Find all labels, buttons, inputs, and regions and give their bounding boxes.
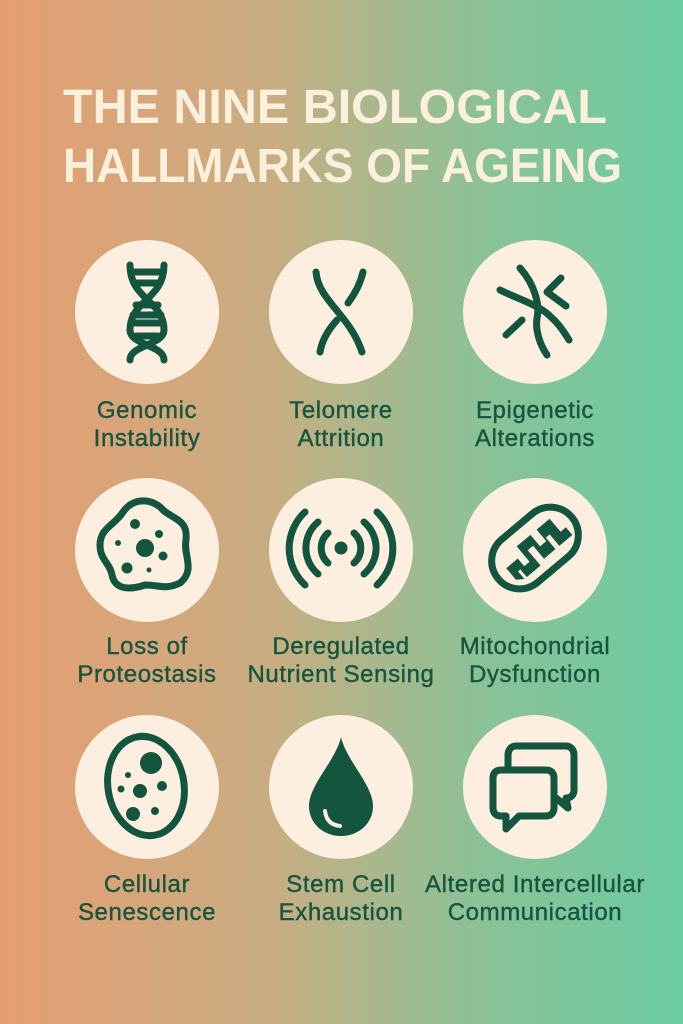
item: telomere attrition — [269, 240, 413, 452]
item: telomere attrition: Attrition — [298, 425, 384, 452]
item: mitochondrial dysfunction: Mitochondrial — [460, 633, 610, 660]
item: epigenetic alterations: Alterations — [475, 425, 595, 452]
item: epigenetic alterations: Epigenetic — [476, 397, 594, 424]
icon: drop — [309, 737, 373, 836]
item: loss of proteostasis — [75, 478, 219, 688]
item: loss of proteostasis: Proteostasis — [77, 661, 217, 688]
item: altered intercellular communication: Communication — [448, 899, 622, 926]
item: epigenetic alterations — [463, 240, 607, 452]
title: HALLMARKS OF AGEING — [63, 140, 622, 193]
item: altered intercellular communication: Altered Intercellular — [425, 871, 645, 898]
item: stem cell exhaustion: Stem Cell — [286, 871, 396, 898]
item: genomic instability: Genomic — [97, 397, 197, 424]
icon: amoeba cell — [100, 501, 188, 588]
item: stem cell exhaustion: Exhaustion — [279, 899, 403, 926]
item: stem cell exhaustion — [269, 715, 413, 926]
item: mitochondrial dysfunction — [460, 478, 610, 688]
icon: broken strands — [500, 268, 569, 355]
item: genomic instability — [75, 240, 219, 452]
icon: speech bubbles — [493, 746, 574, 829]
item: deregulated nutrient sensing: Nutrient Sensing — [247, 661, 435, 688]
icon: signal waves — [289, 512, 393, 585]
icon: chromosome — [316, 272, 363, 352]
item: mitochondrial dysfunction: Dysfunction — [469, 661, 601, 688]
item: deregulated nutrient sensing: Deregulated — [272, 633, 410, 660]
item: cellular senescence: Cellular — [104, 871, 190, 898]
item: telomere attrition: Telomere — [289, 397, 393, 424]
item: altered intercellular communication — [425, 715, 645, 926]
item: cellular senescence — [75, 715, 219, 926]
item: genomic instability: Instability — [94, 425, 200, 452]
title — [63, 81, 622, 193]
icon: mitochondrion — [480, 496, 590, 600]
item: cellular senescence: Senescence — [78, 899, 216, 926]
item: loss of proteostasis: Loss of — [106, 633, 188, 660]
icon: oval cell — [100, 730, 192, 842]
item: deregulated nutrient sensing — [247, 478, 435, 688]
title: THE NINE BIOLOGICAL — [63, 81, 607, 134]
icon: dna — [130, 265, 164, 360]
